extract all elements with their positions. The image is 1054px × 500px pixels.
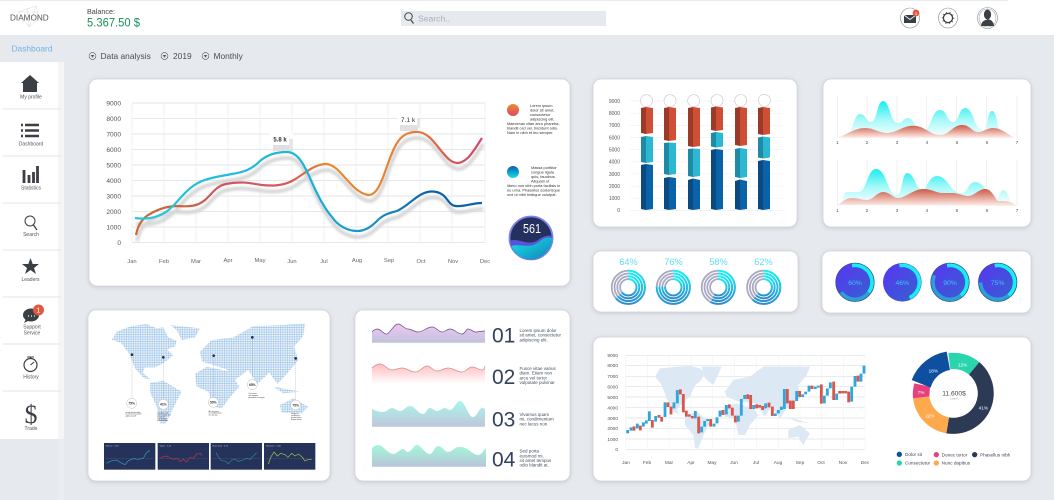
balance: 5.367.50 $ (87, 16, 141, 30)
candlestick y labels: 6000 (607, 384, 618, 390)
panel: ridge area charts (823, 79, 1031, 227)
candlestick x labels: May (707, 460, 717, 466)
mini chart 1: Bitcoin · 1.32 (106, 445, 119, 448)
text 01 (520, 328, 562, 342)
nav: leaders (21, 258, 40, 283)
x axis labels: Oct (416, 259, 426, 265)
text 04: euismod mi, (520, 453, 544, 458)
y axis labels: 9000 (609, 99, 620, 105)
marker captions: nisl natoque (248, 394, 258, 397)
panel: main line chart (89, 79, 570, 286)
text 04: odio blandit at. (520, 463, 549, 468)
marker captions: penatibus et magnis (248, 396, 265, 399)
marker captions: ipsum finibus (291, 417, 302, 419)
marker captions: vestibulum (291, 414, 300, 417)
y axis labels: 6000 (609, 136, 620, 142)
bottom chart red area (838, 189, 1017, 206)
area 02 (372, 364, 485, 384)
text 02: diam. Etiam non (520, 371, 553, 376)
x axis labels: May (255, 258, 266, 264)
legend: orange series: Lorem ipsum (530, 103, 552, 108)
panel: circular progress gauges (822, 251, 1031, 313)
top bar (0, 0, 1054, 35)
text 01: Lorem ipsum dolor (520, 328, 557, 333)
nav: dashboard: Dashboard (19, 142, 43, 148)
bottom chart x labels: 1 (836, 208, 839, 214)
mini chart 1 (104, 443, 155, 470)
nav: trade: $ (24, 400, 38, 429)
x axis labels: Jan (127, 259, 137, 265)
y axis labels: 7000 (609, 123, 620, 129)
gauge 75% (978, 263, 1017, 302)
blue series line (135, 152, 482, 231)
text 02: vulputate pulvinar (520, 380, 555, 385)
marker captions: Orci varius (248, 393, 257, 395)
dotted world map (112, 323, 308, 423)
icon: profile (978, 8, 998, 28)
ring gauge 58%: 58% (709, 257, 728, 267)
mini chart 2: Value · 1.21 (160, 446, 172, 448)
gauge 90%: 90% (943, 280, 957, 287)
candlestick x labels: Jan (622, 460, 630, 466)
gauge 60% (835, 263, 875, 302)
legend: orange series: blandit orci vel, tincidunt odio. (507, 126, 558, 130)
gauge 46%: 46% (895, 280, 909, 287)
y axis labels: 2000 (106, 209, 121, 216)
text 04 (520, 449, 552, 468)
donut legend: Donec tortor (942, 452, 968, 457)
marker circles (640, 94, 770, 107)
donut chart: 12% (958, 363, 967, 368)
donut chart: 41% (979, 405, 988, 410)
y axis labels: 4000 (106, 178, 121, 185)
donut chart: 7% (918, 390, 924, 395)
candlestick y labels: 8000 (607, 363, 618, 369)
donut chart: Lorem (950, 396, 959, 400)
number 04: 04 (492, 448, 516, 472)
area 03 (372, 401, 485, 427)
mini chart 4 (264, 443, 315, 470)
x axis labels: Feb (159, 259, 169, 265)
ring gauge 62% (747, 257, 780, 304)
y axis labels: 5000 (609, 148, 620, 154)
nav: dashboard (19, 125, 43, 148)
legend: orange series (507, 103, 560, 135)
bottom chart x labels: 3 (896, 208, 899, 214)
y axis labels (609, 99, 620, 214)
legend: blue series: libero non nibh porta facilisis in (507, 183, 560, 188)
x axis labels: Aug (352, 258, 362, 264)
gauge 90% (930, 263, 970, 302)
candlestick chart (626, 355, 865, 449)
logo (10, 6, 49, 27)
marker captions: adipiscing elit (125, 415, 137, 418)
nav: my profile (20, 75, 42, 100)
number 01: 01 (492, 324, 515, 348)
mini chart 2 (158, 443, 209, 470)
candlestick y labels: 2000 (607, 426, 618, 432)
marker captions: Curabitur sed (157, 411, 168, 414)
icon: settings (938, 8, 958, 28)
top chart x labels: 6 (986, 140, 989, 146)
panel: world map: 75% (292, 403, 299, 407)
nav: search (23, 216, 39, 238)
candlestick y labels: 1000 (607, 437, 618, 443)
text 04: Sed porta (520, 449, 540, 454)
text 04: sit amet tempus (520, 458, 552, 463)
bar 2 (664, 107, 676, 210)
y axis labels: 1000 (609, 196, 620, 202)
filter row: Monthly (214, 51, 244, 61)
top chart x labels: 2 (866, 140, 869, 146)
legend: blue series: eu urna. Phasellus scelerisque (507, 188, 560, 192)
candlestick y labels: 9000 (607, 353, 618, 359)
balance (87, 7, 141, 30)
gauge: 561: 561 (523, 222, 541, 236)
panel: numbered area list (355, 310, 570, 481)
bar 1 (641, 107, 653, 210)
mini chart 3: New stats · 4.71 (213, 445, 229, 448)
y axis labels: 8000 (106, 116, 121, 123)
marker captions: sit amet consectetur (125, 413, 142, 416)
candlestick x labels: Jul (753, 460, 759, 466)
marker captions: sed gravida (157, 418, 167, 420)
y axis labels: 0 (117, 240, 121, 247)
nav: support service: Service (24, 330, 41, 336)
nav: statistics: Statistics (21, 186, 41, 192)
donut legend: Consectetur (905, 461, 931, 466)
top chart x labels: 4 (926, 140, 929, 146)
nav: trade: Trade (25, 426, 38, 432)
text 03 (520, 412, 554, 426)
number 02: 02 (492, 366, 515, 389)
marker captions: Integer at (291, 412, 299, 415)
top chart cyan area (845, 101, 1003, 138)
candlestick x labels (622, 460, 870, 466)
y axis labels: 7000 (106, 132, 121, 138)
candlestick y labels (607, 353, 618, 453)
bottom chart x labels (836, 208, 1019, 214)
marker captions: vitae tincidunt (157, 419, 169, 422)
donut legend (897, 452, 1011, 466)
nav: search: Search (23, 232, 39, 238)
y axis labels: 2000 (609, 184, 620, 190)
legend: blue series (507, 165, 560, 197)
bottom chart x labels: 7 (1016, 208, 1019, 214)
text 02: Fusce vitae varius (520, 366, 557, 371)
bottom chart cyan area (838, 169, 1015, 205)
callout: 7.1 k: 7.1 k (401, 117, 416, 124)
nav: history: History (23, 374, 39, 380)
nav: leaders: Leaders (21, 277, 40, 283)
top chart x labels: 5 (956, 140, 959, 146)
donut legend: Dolor sit (905, 452, 923, 457)
candlestick x labels: Nov (839, 460, 848, 466)
x axis labels: Jul (320, 259, 328, 265)
legend: orange series: consectetur (530, 112, 551, 117)
nav: statistics (21, 166, 41, 192)
donut chart: 11.600$ (942, 391, 966, 398)
x axis labels (127, 258, 490, 265)
text 02 (520, 366, 557, 385)
mini chart 4: Statistics · 1.84 (266, 445, 282, 448)
legend: orange series: Maecenas vitae arcu pharetra, (507, 121, 560, 126)
y axis labels: 9000 (106, 100, 121, 108)
ring gauge 62%: 62% (754, 257, 773, 267)
bottom chart x labels: 6 (986, 208, 989, 214)
top chart x labels: 7 (1016, 140, 1019, 146)
line shadows (136, 138, 483, 241)
candlestick x labels: Apr (687, 460, 695, 466)
top chart x labels: 3 (896, 140, 899, 146)
icon: mail (900, 8, 920, 28)
panel: world map: 75% (128, 402, 135, 406)
gauge 46% (883, 263, 922, 302)
top chart x labels: 1 (836, 140, 839, 146)
y axis labels: 6000 (106, 147, 121, 154)
legend: orange series: adipiscing elit. (530, 116, 554, 122)
x axis labels: Sep (384, 258, 394, 264)
donut legend: Phasellus nibh (980, 452, 1011, 457)
candlestick x labels: Jun (730, 460, 738, 466)
y axis labels: 5000 (106, 162, 121, 170)
text 03: Vivamus quam (520, 412, 549, 417)
bar 3 (688, 107, 700, 210)
y axis labels: 3000 (609, 172, 620, 178)
falling candles (634, 376, 858, 433)
legend: blue series: Aliquam ut (531, 178, 550, 184)
icon: mail: 1 (915, 11, 918, 16)
mini chart 3 (211, 443, 262, 470)
panel: world map: 41% (160, 403, 167, 407)
balance: Balance: (87, 7, 115, 16)
area 04 (372, 445, 486, 467)
ring gauge 64%: 64% (619, 257, 638, 267)
x axis labels: Apr (223, 258, 233, 264)
candlestick x labels: Mar (665, 460, 674, 466)
candlestick x labels: Feb (643, 460, 651, 466)
top chart x labels (836, 140, 1019, 146)
bar 4 (711, 106, 723, 210)
x axis labels: Jun (287, 259, 297, 265)
gauge 60%: 60% (848, 280, 862, 287)
candlestick y labels: 7000 (607, 374, 618, 380)
y axis labels: 0 (617, 208, 620, 214)
text 01: sit amet, consectetur (520, 333, 562, 338)
bar 5 (735, 107, 747, 210)
ring gauge 58% (702, 257, 735, 304)
nav: support service: 1 (37, 308, 41, 314)
donut chart: 18% (929, 369, 938, 374)
marker captions: nunc tempor sed (157, 413, 171, 416)
area 01 (372, 324, 485, 343)
line 01 (372, 324, 485, 334)
top chart red area (837, 125, 1015, 138)
filter row (89, 51, 244, 61)
donut chart: 22% (925, 414, 935, 419)
text 02: arcu vel tortor (520, 375, 548, 380)
candlestick x labels: Oct (817, 460, 825, 466)
legend: blue series: congue ligula (531, 170, 555, 174)
donut legend: Nunc dapibus (942, 461, 971, 466)
filter row: Data analysis (100, 51, 151, 61)
legend: blue series: Massa porttitor (531, 165, 557, 170)
panel: world map: 50% (210, 401, 217, 405)
marker captions: nec lacinia (209, 415, 218, 417)
text 03: mi, condimentum (520, 417, 554, 422)
orange series line (136, 132, 482, 235)
candlestick x labels: Aug (774, 460, 783, 466)
nav: support service (23, 304, 44, 336)
sidebar (0, 36, 64, 500)
legend: orange series: Nam in nibh et leo semper. (507, 130, 553, 135)
legend: blue series: quis, faucibus. (531, 174, 556, 179)
candlestick y labels: 3000 (607, 416, 618, 422)
ring gauge 76%: 76% (664, 257, 683, 267)
x axis labels: Mar (191, 259, 201, 265)
logo: DIAMOND (10, 14, 49, 22)
candlestick y labels: 0 (615, 447, 618, 453)
candlestick y labels: 4000 (607, 406, 618, 412)
line 02 (372, 364, 485, 372)
background world map (655, 366, 810, 448)
panel: world map: 65% (249, 383, 256, 387)
candlestick y labels: 5000 (607, 395, 618, 401)
x axis labels: Dec (480, 259, 490, 265)
callout: 5.8 k (269, 133, 293, 151)
y axis labels: 8000 (609, 111, 620, 117)
y axis labels: 3000 (106, 194, 121, 200)
y axis labels (106, 100, 121, 247)
panel: world map (88, 310, 330, 481)
donut chart (897, 352, 1011, 466)
candlestick x labels: Sep (796, 460, 805, 466)
panel: stacked 3D bars (593, 79, 797, 227)
number 03: 03 (492, 408, 515, 432)
filter row: 2019 (173, 51, 192, 61)
percentage markers (127, 380, 301, 410)
legend: orange series: dolor sit amet, (530, 108, 554, 112)
nav: support service: Support (23, 324, 41, 330)
marker captions: feugiat lorem (291, 418, 302, 421)
map pins and leader lines (132, 337, 296, 400)
grid (132, 103, 485, 242)
gauge: 561 (510, 216, 552, 260)
text 01: adipiscing elit. (520, 337, 548, 342)
y axis labels: 4000 (609, 160, 620, 166)
callout: 7.1 k (397, 114, 420, 131)
marker captions (125, 393, 302, 422)
rising candles (628, 366, 864, 433)
panel: concentric ring gauges (593, 251, 798, 312)
marker captions: nisi ipsum (157, 416, 166, 418)
legend: blue series: orci ut nibh tristique volutpat. (507, 192, 557, 197)
marker captions: Lorem ipsum dolor (125, 412, 141, 414)
panel: candlestick and donut (593, 337, 1031, 481)
search box (401, 11, 606, 26)
bottom chart x labels: 2 (866, 208, 869, 214)
text 03: nec lacus non (520, 421, 548, 426)
marker captions: Mauris porta (209, 410, 220, 413)
ring gauge 76% (657, 257, 690, 304)
bar 6 (758, 107, 770, 210)
search box: Search.. (418, 14, 450, 24)
bottom chart x labels: 5 (956, 208, 959, 214)
callout: 5.8 k: 5.8 k (273, 138, 287, 144)
gauge 75%: 75% (991, 280, 1005, 287)
ring gauge 64% (612, 257, 645, 304)
marker captions: in condimentum (209, 412, 222, 415)
nav: my profile: My profile (20, 94, 42, 100)
bottom chart x labels: 4 (926, 208, 929, 214)
y axis labels: 1000 (106, 224, 121, 232)
candlestick x labels: Dec (861, 460, 870, 466)
x axis labels: Nov (448, 259, 458, 265)
dashboard nav label: Dashboard (12, 44, 53, 54)
nav: history (23, 357, 39, 380)
